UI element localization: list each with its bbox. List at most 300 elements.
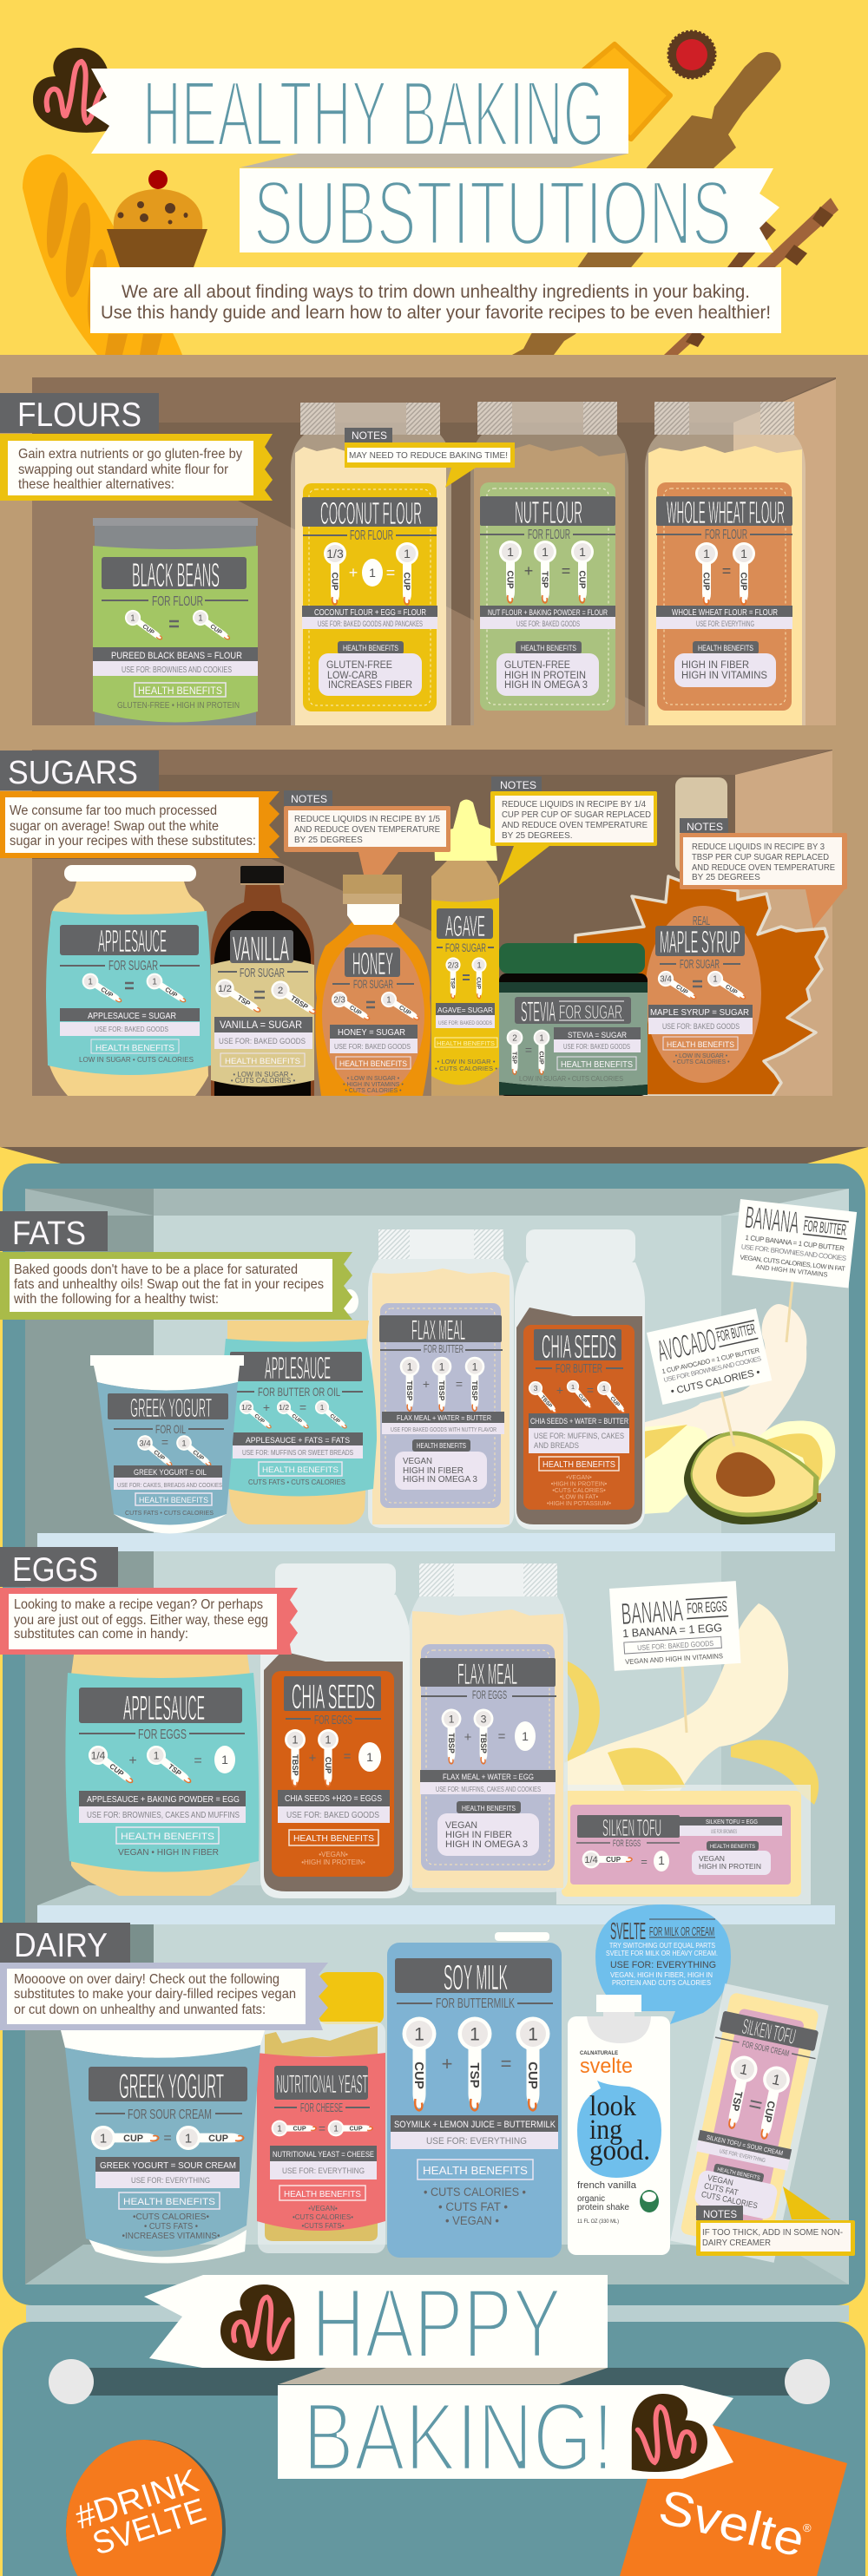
product: chia seeds bottle: •CUTS CALORIES• — [552, 1488, 606, 1494]
icon: rolling pin — [512, 52, 781, 355]
product: nutritional yeast jar: 1 — [333, 2125, 339, 2134]
product: maple syrup bottle: 1 — [713, 974, 718, 984]
product: silken tofu for eggs: HIGH IN PROTEIN — [699, 1863, 761, 1871]
product: flax meal jar: FOR BUTTER — [424, 1342, 464, 1355]
product: soy milk carton: SOYMILK + LEMON JUICE = BUTTERMILK — [394, 2120, 556, 2130]
product: honey bottle: CUP — [348, 1005, 363, 1017]
product: stevia jar — [499, 943, 648, 1096]
intro ribbon: eggs: Looking to make a recipe vegan? Or perhaps — [14, 1597, 263, 1612]
product: applesauce for eggs: + — [128, 1753, 137, 1768]
product: whole wheat flour jar: = — [722, 562, 731, 580]
product: vanilla bottle: FOR SUGAR — [240, 966, 285, 980]
product: silken tofu for eggs: CUP — [606, 1856, 621, 1864]
product: nutritional yeast jar: CUP — [293, 2125, 306, 2133]
sign: banana for butter: AND HIGH IN VITAMINS — [755, 1263, 828, 1279]
product: honey bottle: HONEY — [352, 946, 393, 981]
product: flax meal jar: TBSP — [405, 1380, 414, 1401]
product: applesauce jar: 1 — [88, 978, 93, 987]
product: maple syrup bottle: MAPLE SYRUP = SUGAR — [650, 1007, 749, 1018]
product: chia seeds bottle: 3 — [534, 1384, 538, 1393]
product: maple syrup bottle: HEALTH BENEFITS — [667, 1040, 734, 1050]
product: nutritional yeast jar: •VEGAN• — [308, 2205, 338, 2212]
flag: svelte logo: Svelte — [654, 2479, 810, 2567]
product: silken tofu for sour cream: SILKEN TOFU = SOUR CREAM — [706, 2134, 784, 2157]
product: chia seeds bottle: CHIA SEEDS — [542, 1329, 616, 1366]
product: soy milk carton: HEALTH BENEFITS — [423, 2164, 528, 2177]
sign: avocado for butter: AVOCADO — [654, 1322, 720, 1368]
product: applesauce for butter or oil — [221, 1289, 377, 1524]
heading: dairy — [0, 1923, 154, 1964]
product: applesauce for eggs: APPLESAUCE — [123, 1689, 205, 1727]
intro ribbon: dairy: substitutes to make your dairy-filled recipes vegan — [14, 1987, 296, 2002]
product: nutritional yeast jar: 1 — [277, 2125, 282, 2134]
heading: fats: FATS — [12, 1216, 86, 1252]
product: nut flour jar: FOR FLOUR — [528, 528, 570, 542]
product: chia seeds bottle: •LOW IN FAT• — [560, 1494, 599, 1501]
product: silken tofu for sour cream: VEGAN — [707, 2173, 734, 2188]
product: silken tofu for sour cream: USE FOR: EVERYTHING — [719, 2148, 766, 2164]
product: stevia jar: LOW IN SUGAR • CUTS CALORIES — [519, 1074, 623, 1083]
product: coconut flour jar: FOR FLOUR — [350, 528, 393, 543]
product: whole wheat flour jar: WHOLE WHEAT FLOUR = FLOUR — [672, 608, 778, 618]
product: soy milk carton: • VEGAN • — [445, 2214, 499, 2227]
product: coconut flour jar: COCONUT FLOUR + EGG = FLOUR — [314, 608, 426, 618]
product: chia seeds bottle for eggs: TBSP — [291, 1754, 299, 1776]
product: greek yogurt for sour cream: = — [163, 2131, 172, 2146]
callout: maple notes — [680, 818, 847, 928]
product: agave bottle: AGAVE= SUGAR — [437, 1006, 493, 1014]
banner: baking: BAKING! — [303, 2383, 614, 2491]
callout: agave notes: CUP PER CUP OF SUGAR REPLACED — [502, 810, 651, 820]
product: flax meal jar: TBSP — [470, 1380, 479, 1401]
product: nut flour jar: NUT FLOUR — [515, 495, 582, 530]
header illustrations — [23, 31, 838, 355]
product: black beans can: GLUTEN-FREE • HIGH IN PROTEIN — [117, 701, 240, 711]
product: coconut flour jar: GLUTEN-FREE — [326, 660, 392, 671]
product: flax meal jar for eggs: HIGH IN OMEGA 3 — [445, 1839, 528, 1850]
product: applesauce jar: 1 — [152, 978, 157, 987]
intro ribbon: eggs: you are just out of eggs. Either way, these egg — [14, 1613, 268, 1628]
product: flax meal jar: HIGH IN FIBER — [403, 1465, 464, 1476]
product: svelte carton: organic — [577, 2194, 605, 2204]
product: maple syrup bottle: CUP — [724, 984, 739, 996]
product: soy milk carton: 1 — [414, 2025, 424, 2045]
product: agave bottle: USE FOR: BAKED GOODS — [438, 1021, 492, 1026]
intro ribbon: fats: with the following for a healthy twist: — [13, 1292, 219, 1307]
product: flax meal jar for eggs: 1 — [449, 1713, 455, 1725]
product: coconut flour jar: USE FOR: BAKED GOODS AND PANCAKES — [318, 619, 423, 628]
heading: fats — [0, 1211, 108, 1252]
product: svelte carton: CALNATURALE — [580, 2050, 619, 2056]
product: greek yogurt for oil: 3/4 — [139, 1439, 151, 1448]
callout: svelte speech bubble: SVELTE — [610, 1917, 646, 1944]
product: soy milk carton: CUP — [525, 2061, 540, 2089]
product: silken tofu for sour cream: CUTS CALORIES — [700, 2190, 759, 2211]
product: nutritional yeast jar — [257, 1972, 385, 2253]
product: nut flour jar: HIGH IN PROTEIN — [504, 671, 586, 681]
product: whole wheat flour jar: 1 — [740, 547, 747, 560]
product: agave bottle: 2/3 — [448, 960, 458, 969]
product: nutritional yeast jar: •CUTS CALORIES• — [293, 2213, 353, 2221]
flag: svelte logo — [620, 2425, 847, 2576]
intro ribbon: flours — [0, 434, 273, 501]
product: stevia jar: HEALTH BENEFITS — [561, 1060, 633, 1070]
product: coconut flour jar: 1/3 — [326, 547, 344, 560]
product: greek yogurt for oil: 1 — [181, 1439, 187, 1448]
product: greek yogurt for oil: HEALTH BENEFITS — [139, 1496, 208, 1504]
product: applesauce for butter or oil: APPLESAUCE — [265, 1350, 331, 1386]
product: honey bottle: 2/3 — [333, 995, 345, 1005]
product: vanilla bottle: 2 — [278, 986, 283, 996]
panel: fats shelf — [0, 1198, 857, 1534]
product: stevia jar: 1 — [539, 1034, 544, 1044]
fridge background — [0, 1147, 868, 2576]
product: whole wheat flour jar: FOR FLOUR — [705, 528, 747, 542]
product: maple syrup bottle — [573, 777, 827, 1096]
callout: vanilla honey notes — [284, 790, 450, 875]
product: nutritional yeast jar: HEALTH BENEFITS — [284, 2189, 361, 2199]
sign: avocado for butter: USE FOR: BROWNIES AND COOKIES — [663, 1354, 762, 1384]
sign: banana for eggs: 1 BANANA = 1 EGG — [622, 1621, 722, 1640]
callout: agave notes: BY 25 DEGREES. — [502, 831, 573, 841]
intro ribbon: dairy: Moooove on over dairy! Check out the following — [14, 1972, 279, 1987]
product: applesauce for eggs: TSP — [167, 1762, 183, 1778]
product: chia seeds bottle: TBSP — [539, 1394, 553, 1409]
product: silken tofu for eggs: VEGAN — [699, 1855, 725, 1863]
title banner: healthy baking — [86, 61, 628, 166]
product: silken tofu for sour cream: TSP — [729, 2090, 745, 2113]
intro ribbon: flours: Gain extra nutrients or go gluten-free by — [18, 447, 242, 462]
product: vanilla bottle: TSP — [236, 993, 252, 1008]
product: chia seeds bottle for eggs: FOR EGGS — [314, 1713, 352, 1727]
product: applesauce for butter or oil: 1/2 — [241, 1403, 252, 1412]
product: whole wheat flour jar: CUP — [701, 572, 710, 591]
product: greek yogurt for oil: FOR OIL — [155, 1422, 186, 1436]
product: soy milk carton: = — [501, 2053, 511, 2075]
product: greek yogurt for oil: GREEK YOGURT = OIL — [134, 1468, 207, 1477]
product: chia seeds bottle: •HIGH IN POTASSIUM• — [547, 1501, 612, 1507]
intro ribbon: dairy — [0, 1963, 328, 2030]
product: stevia jar: 2 — [512, 1034, 517, 1044]
product: black beans can: CUP — [209, 624, 223, 636]
product: maple syrup bottle: • LOW IN SUGAR • — [675, 1053, 728, 1059]
sign: banana for butter: USE FOR: BROWNIES AND COOKIES — [740, 1242, 847, 1262]
product: silken tofu for sour cream: 1 — [739, 2061, 750, 2078]
product: applesauce for butter or oil: HEALTH BENEFITS — [262, 1465, 339, 1475]
product: soy milk carton: SOY MILK — [444, 1957, 508, 1997]
icon: muffin — [107, 170, 207, 267]
product: black beans can: 1 — [198, 613, 203, 623]
product: agave bottle: TSP — [450, 978, 456, 989]
product: flax meal jar: HEALTH BENEFITS — [417, 1442, 466, 1450]
product: greek yogurt for oil: CUP — [191, 1449, 205, 1462]
title ribbon fold — [240, 154, 628, 167]
intro ribbon: sugars: We consume far too much processed — [10, 803, 217, 818]
sign: banana for eggs: FOR EGGS — [687, 1598, 727, 1617]
product: applesauce for eggs: VEGAN • HIGH IN FIBER — [118, 1848, 219, 1858]
product: chia seeds bottle: HEALTH BENEFITS — [542, 1460, 615, 1470]
product: whole wheat flour jar: USE FOR: EVERYTHING — [696, 619, 754, 628]
product: flax meal jar for eggs: HIGH IN FIBER — [445, 1830, 512, 1840]
product: black beans can: USE FOR: BROWNIES AND COOKIES — [122, 665, 232, 675]
product: soy milk carton: 1 — [470, 2025, 480, 2045]
callout: coconut notes: NOTES — [352, 431, 387, 442]
product: whole wheat flour jar: CUP — [738, 572, 748, 591]
product: agave bottle: HEALTH BENEFITS — [437, 1039, 495, 1047]
product: flax meal jar for eggs: TBSP — [447, 1733, 456, 1753]
product: applesauce for butter or oil: CUP — [329, 1413, 341, 1425]
product: nut flour jar: + — [524, 562, 533, 580]
badge: drink svelte: #DRINK — [71, 2462, 203, 2537]
sign: avocado for butter: FOR BUTTER — [715, 1321, 757, 1345]
callout: maple notes: TBSP PER CUP SUGAR REPLACED — [692, 853, 829, 862]
product: greek yogurt for oil: USE FOR: CAKES, BREADS AND COOKIES — [117, 1481, 222, 1489]
product: maple syrup bottle: CUP — [674, 984, 689, 996]
product: applesauce for eggs: 1/4 — [91, 1749, 106, 1761]
panel: sugars shelf — [0, 750, 847, 1096]
product: applesauce jar: APPLESAUCE — [98, 923, 167, 959]
product: greek yogurt for sour cream: HEALTH BENEFITS — [123, 2197, 215, 2207]
product: chia seeds bottle for eggs: 1 — [292, 1734, 299, 1747]
product: nutritional yeast jar: CUP — [349, 2125, 363, 2133]
callout: svelte speech bubble: USE FOR: EVERYTHING — [610, 1960, 716, 1970]
product: greek yogurt for oil: CUP — [152, 1449, 166, 1462]
product: stevia jar: = — [525, 1043, 532, 1057]
product: banana for butter — [642, 1304, 835, 1514]
product: honey bottle: USE FOR: BAKED GOODS — [334, 1043, 411, 1051]
heading: eggs: EGGS — [12, 1551, 98, 1589]
product: applesauce for eggs: 1 — [154, 1749, 160, 1761]
product: honey bottle: HEALTH BENEFITS — [339, 1059, 407, 1068]
product: chia seeds bottle for eggs: USE FOR: BAKED GOODS — [286, 1811, 379, 1820]
product: soy milk carton: FOR BUTTERMILK — [436, 1996, 515, 2011]
product: chia seeds bottle for eggs: CUP — [324, 1757, 332, 1773]
product: chia seeds bottle for eggs: CHIA SEEDS — [292, 1678, 375, 1716]
product: greek yogurt for sour cream: 1 — [100, 2131, 107, 2146]
panel: dairy shelf: NUTRITIONAL YEAST — [276, 2070, 368, 2099]
callout: maple notes: REDUCE LIQUIDS IN RECIPE BY 3 — [692, 842, 825, 852]
product: coconut flour jar — [291, 403, 451, 725]
product: coconut flour jar: 1 — [404, 547, 411, 560]
product: chia seeds bottle: CUP — [577, 1393, 588, 1405]
product: nut flour jar: HEALTH BENEFITS — [521, 644, 576, 652]
product: greek yogurt for oil: GREEK YOGURT — [130, 1393, 212, 1423]
product: flax meal jar for eggs: USE FOR: MUFFINS, CAKES AND COOKIES — [436, 1786, 541, 1793]
product: silken tofu for sour cream: HEALTH BENEFITS — [717, 2166, 761, 2181]
product: agave bottle: FOR SUGAR — [445, 941, 486, 954]
product: vanilla bottle: VANILLA — [233, 930, 289, 968]
sign: banana for butter — [732, 1198, 857, 1342]
product: coconut flour jar: HEALTH BENEFITS — [343, 644, 398, 652]
product: flax meal jar: USE FOR BAKED GOODS WITH NUTTY FLAVOR — [391, 1426, 496, 1433]
product: agave bottle — [431, 800, 499, 1096]
callout: vanilla honey notes: AND REDUCE OVEN TEMPERATURE — [294, 825, 440, 835]
sign: banana for eggs — [609, 1581, 741, 1733]
product: maple syrup bottle: • CUTS CALORIES • — [673, 1059, 730, 1065]
product: greek yogurt for sour cream: USE FOR: EVERYTHING — [131, 2176, 210, 2186]
sign: banana for eggs: VEGAN AND HIGH IN VITAMINS — [625, 1652, 723, 1666]
heading: flours: FLOURS — [17, 397, 141, 434]
product: black beans can — [93, 518, 258, 725]
product: chia seeds bottle: CUP — [608, 1395, 621, 1408]
product: silken tofu for eggs: SILKEN TOFU — [602, 1814, 661, 1841]
product: maple syrup bottle: 3/4 — [660, 974, 672, 984]
product: black beans can: 1 — [130, 613, 135, 623]
callout: coconut notes — [345, 428, 515, 488]
sign: avocado for butter: 1 CUP AVOCADO = 1 CUP BUTTER — [661, 1346, 760, 1375]
product: chia seeds bottle for eggs: 1 — [325, 1734, 332, 1747]
product: coconut flour jar: 1 — [369, 566, 376, 580]
product: flax meal jar for eggs — [408, 1563, 568, 1892]
product: greek yogurt for sour cream: FOR SOUR CREAM — [128, 2107, 212, 2122]
callout: vanilla honey notes: BY 25 DEGREES — [294, 836, 363, 845]
product: chia seeds bottle: CHIA SEEDS + WATER = BUTTER — [530, 1417, 628, 1426]
product: vanilla bottle: USE FOR: BAKED GOODS — [219, 1037, 306, 1045]
product: silken tofu for eggs — [556, 1785, 811, 1904]
product: black beans can: PUREED BLACK BEANS = FLOUR — [111, 651, 242, 661]
product: vanilla bottle — [211, 866, 320, 1096]
heading: dairy: DAIRY — [14, 1927, 108, 1964]
product: silken tofu for eggs: 1/4 — [584, 1855, 598, 1865]
product: applesauce for butter or oil: CUP — [291, 1413, 303, 1425]
callout: svelte speech bubble: SVELTE FOR MILK OR HEAVY CREAM. — [606, 1950, 718, 1957]
intro ribbon: flours: these healthier alternatives: — [18, 477, 174, 492]
product: soy milk carton — [387, 1932, 562, 2258]
product: silken tofu for eggs: = — [641, 1855, 648, 1868]
product: nutritional yeast jar: NUTRITIONAL YEAST = CHEESE — [273, 2150, 374, 2159]
product: chia seeds bottle for eggs: = — [344, 1749, 352, 1764]
product: chia seeds bottle: •VEGAN• — [566, 1475, 592, 1481]
intro ribbon: fats: Baked goods don't have to be a place for saturated — [14, 1262, 298, 1277]
panel: flours shelf — [0, 377, 836, 725]
callout: maple notes: BY 25 DEGREES — [692, 873, 760, 882]
intro ribbon: fats — [0, 1252, 352, 1320]
product: nut flour jar: CUP — [576, 570, 587, 589]
icon: cookie — [582, 42, 673, 142]
product: soy milk carton: TSP — [467, 2062, 482, 2088]
product: coconut flour jar: CUP — [330, 572, 339, 591]
product: flax meal jar: + — [423, 1377, 430, 1391]
product: vanilla bottle: • LOW IN SUGAR • — [233, 1071, 293, 1078]
badge: drink svelte — [66, 2440, 226, 2576]
product: soy milk carton: 1 — [528, 2025, 538, 2045]
callout: tofu notes: NOTES — [703, 2208, 737, 2220]
product: whole wheat flour jar: HEALTH BENEFITS — [698, 644, 753, 652]
product: honey bottle: HONEY = SUGAR — [338, 1027, 405, 1038]
product: svelte carton: look — [589, 2091, 636, 2122]
product: applesauce for butter or oil: 1/2 — [279, 1403, 289, 1412]
product: silken tofu for sour cream: FOR SOUR CREAM — [741, 2040, 790, 2059]
product: nut flour jar: CUP — [505, 570, 514, 589]
product: chia seeds bottle for eggs: + — [309, 1751, 317, 1766]
product: whole wheat flour jar: 1 — [703, 547, 710, 560]
product: soy milk carton: CUP — [411, 2061, 426, 2089]
intro text block: We are all about finding ways to trim down unhealthy ingredients in your baking. — [122, 281, 750, 302]
product: silken tofu for sour cream: CUTS FAT — [703, 2181, 740, 2198]
intro ribbon: sugars: sugar on average! Swap out the white — [10, 819, 219, 834]
product: vanilla bottle: 1/2 — [218, 984, 232, 994]
product: flax meal jar for eggs: FLAX MEAL + WATER = EGG — [443, 1773, 534, 1781]
fridge handle — [49, 2359, 830, 2404]
product: applesauce for eggs: FOR EGGS — [138, 1727, 187, 1742]
icon: chocolate heart left — [220, 2284, 294, 2361]
product: flax meal jar for eggs: FLAX MEAL — [457, 1658, 517, 1691]
product: black beans can: CUP — [141, 624, 155, 636]
product: applesauce for butter or oil: CUTS FATS • CUTS CALORIES — [248, 1478, 345, 1486]
product: applesauce jar: CUP — [163, 986, 179, 1000]
callout: agave notes: REDUCE LIQUIDS IN RECIPE BY 1/4 — [502, 800, 646, 810]
product: chia seeds bottle for eggs — [260, 1563, 410, 1898]
product: maple syrup bottle: REAL — [693, 914, 710, 928]
product: black beans can: FOR FLOUR — [152, 594, 203, 609]
product: greek yogurt for sour cream: • CUTS FATS • — [144, 2222, 198, 2232]
product: applesauce jar: LOW IN SUGAR • CUTS CALORIES — [79, 1055, 194, 1064]
product: chia seeds bottle: •HIGH IN PROTEIN• — [551, 1482, 608, 1487]
product: applesauce jar — [46, 865, 211, 1096]
callout: agave notes: AND REDUCE OVEN TEMPERATURE — [502, 821, 648, 830]
product: flax meal jar for eggs: TBSP — [479, 1733, 488, 1753]
product: applesauce for eggs — [65, 1649, 259, 1896]
product: svelte carton: protein shake — [577, 2203, 629, 2212]
product: greek yogurt for sour cream: •INCREASES VITAMINS• — [122, 2232, 220, 2241]
product: silken tofu for sour cream: CUP — [761, 2100, 778, 2124]
product: silken tofu for eggs: SILKEN TOFU = EGG — [706, 1819, 758, 1825]
flag: svelte logo: ® — [803, 2521, 812, 2534]
icon: chocolate heart right — [632, 2394, 707, 2472]
product: nutritional yeast jar: USE FOR: EVERYTHING — [282, 2166, 365, 2176]
product: honey bottle: • HIGH IN VITAMINS • — [343, 1082, 404, 1088]
product: applesauce for butter or oil: FOR BUTTER OR OIL — [258, 1385, 340, 1399]
callout: tofu notes — [696, 2186, 855, 2256]
product: applesauce jar: CUP — [99, 986, 115, 1000]
product: svelte carton: good. — [589, 2135, 650, 2166]
product: flax meal jar: FLAX MEAL — [411, 1314, 465, 1346]
callout: tofu notes: IF TOO THICK, ADD IN SOME NON- — [702, 2227, 843, 2238]
product: nutritional yeast jar: FOR CHEESE — [300, 2101, 343, 2115]
product: agave bottle: 1 — [477, 960, 482, 969]
callout: svelte speech bubble: PROTEIN AND CUTS CALORIES — [612, 1979, 711, 1987]
product: applesauce jar: HEALTH BENEFITS — [95, 1044, 174, 1053]
product: applesauce for eggs: CUP — [108, 1761, 126, 1778]
product: flax meal jar for eggs: + — [464, 1730, 472, 1745]
product: stevia jar: FOR SUGAR — [559, 1001, 622, 1023]
product: nut flour jar: 1 — [579, 545, 586, 559]
product: flax meal jar: VEGAN — [403, 1456, 432, 1466]
product: chia seeds bottle for eggs: HEALTH BENEFITS — [293, 1833, 374, 1844]
product: applesauce jar: APPLESAUCE = SUGAR — [88, 1012, 176, 1021]
product: banana for eggs — [404, 1603, 819, 1813]
product: greek yogurt for oil — [90, 1355, 244, 1534]
product: soy milk carton: • CUTS FAT • — [438, 2200, 508, 2213]
product: honey bottle: 1 — [386, 995, 391, 1005]
callout: svelte speech bubble: VEGAN, HIGH IN FIBER, HIGH IN — [610, 1971, 713, 1979]
sign: banana for butter: VEGAN, CUTS CALORIES, LOW IN FAT — [740, 1253, 846, 1273]
product: flax meal jar: HIGH IN OMEGA 3 — [403, 1474, 477, 1485]
product: svelte carton: ing — [589, 2114, 622, 2146]
product: nut flour jar: 1 — [542, 545, 549, 559]
product: avocado — [684, 1432, 821, 1524]
product: flax meal jar for eggs: 3 — [481, 1713, 487, 1725]
product: black beans can: BLACK BEANS — [132, 557, 220, 594]
product: chia seeds bottle: FOR BUTTER — [556, 1361, 602, 1376]
product: vanilla bottle: TBSP — [289, 994, 310, 1012]
icon: bread loaf — [23, 154, 182, 355]
product: chia seeds bottle: 1 — [571, 1383, 575, 1391]
heading: sugars: SUGARS — [8, 755, 138, 791]
banner: happy — [144, 2269, 608, 2379]
product: nut flour jar: HIGH IN OMEGA 3 — [504, 680, 588, 691]
product: coconut flour jar: CUP — [401, 572, 411, 591]
